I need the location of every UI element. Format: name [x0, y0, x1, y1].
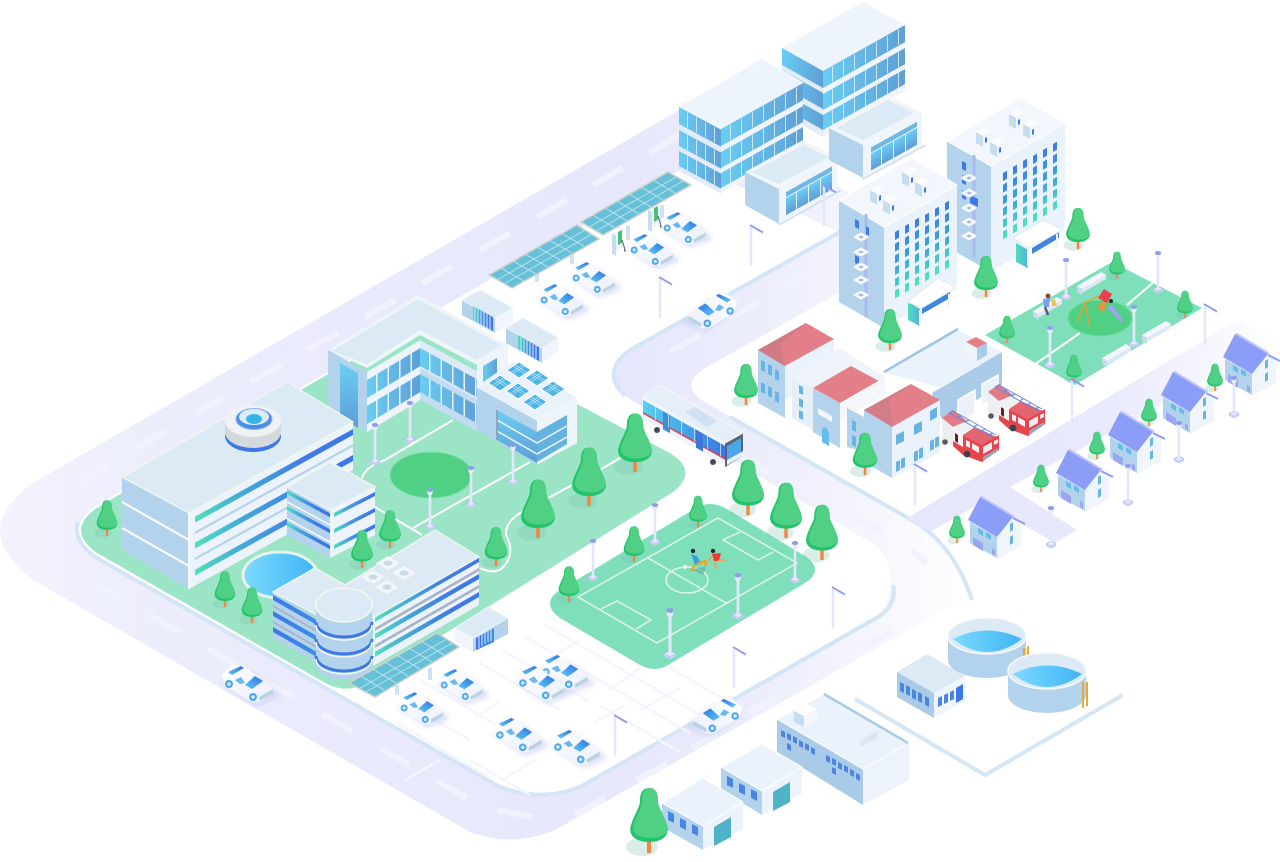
- small garage front: [662, 778, 743, 850]
- building: back office block: [782, 2, 905, 137]
- water tank rear: [948, 618, 1028, 678]
- rooftop solar panels: [488, 362, 565, 410]
- house: [1223, 333, 1280, 396]
- main road network: [0, 98, 980, 840]
- tree: [94, 500, 117, 538]
- tree: [732, 364, 758, 407]
- playground lamps and trees: [997, 251, 1193, 383]
- water tank front: [1008, 653, 1087, 713]
- fire station: [758, 323, 1002, 478]
- people on bench: [1043, 294, 1057, 315]
- left house: [758, 323, 834, 418]
- building: shop near charging station: [745, 140, 841, 225]
- house: [1108, 411, 1165, 474]
- tree: [377, 510, 401, 550]
- car on south-east road: [686, 699, 743, 737]
- tree: [766, 483, 802, 541]
- middle house: [792, 348, 885, 448]
- soccer players: [683, 549, 726, 575]
- road curbs: [77, 232, 894, 795]
- solar canopy right: [581, 172, 691, 240]
- panel: green campus lawn: [80, 320, 686, 690]
- rooftop circular skylight: [225, 405, 281, 452]
- tree: [621, 526, 644, 564]
- entrance canopy: [907, 278, 956, 326]
- sand circle: [1068, 300, 1132, 336]
- storage container one: [462, 290, 513, 333]
- parking lot lines: [395, 625, 725, 795]
- building: front office block: [679, 59, 803, 194]
- large foreground tree: [626, 788, 668, 856]
- tree: [482, 527, 507, 568]
- pump house: [897, 654, 965, 718]
- central round lawn: [390, 452, 472, 498]
- tower windows: [895, 201, 949, 298]
- car on south road: [221, 666, 281, 706]
- white block: fire station district: [692, 0, 1280, 640]
- rooftop units: [870, 167, 930, 215]
- tree: [212, 571, 235, 609]
- air conditioning units: [361, 556, 416, 600]
- campus walking paths: [362, 420, 625, 571]
- fire truck rear: [988, 384, 1045, 436]
- round tower: [316, 588, 372, 680]
- solar canopy left: [489, 225, 599, 288]
- tree: [687, 496, 707, 528]
- apartment tower front: [839, 158, 957, 328]
- fire truck front: [942, 410, 999, 462]
- panel: soccer field: [550, 504, 815, 669]
- tree: [728, 460, 764, 518]
- EV charger two: [648, 204, 661, 232]
- tree: [239, 587, 262, 625]
- residential lamps and trees: [947, 364, 1239, 548]
- house: [1161, 371, 1218, 434]
- small garage rear: [721, 744, 802, 815]
- tree: [349, 530, 373, 570]
- campus lamps: [370, 401, 518, 530]
- EV charger one: [612, 228, 625, 256]
- storage container two: [506, 318, 558, 363]
- building: shop rear: [829, 95, 926, 179]
- house: [1056, 449, 1113, 512]
- swimming pool: [243, 552, 317, 598]
- entrance canopy: [1013, 220, 1063, 268]
- laboratory building: [328, 295, 508, 432]
- car on east road: [681, 294, 738, 332]
- street poles by parking: [614, 587, 845, 756]
- tree: [1064, 208, 1090, 251]
- white city block: campus and parking: [78, 164, 891, 795]
- balconies: [852, 214, 870, 317]
- street pole near shop: [823, 185, 836, 226]
- garage block: [884, 329, 1002, 424]
- playground path: [1034, 281, 1155, 365]
- long utility building: [777, 694, 909, 805]
- apartment tower rear: [947, 98, 1065, 272]
- benches: [1033, 272, 1171, 367]
- water treatment slab: [855, 695, 1123, 775]
- tree: [972, 256, 998, 299]
- solar canopy at campus: [349, 633, 459, 697]
- road lane dashes: [38, 135, 926, 817]
- tree: [850, 433, 877, 477]
- hospital wing: [287, 462, 375, 558]
- rooftop units: [976, 109, 1038, 157]
- street poles by lot: [659, 225, 763, 318]
- solar roof annex: [477, 362, 577, 465]
- cars at chargers: [537, 212, 713, 319]
- tree: [876, 309, 902, 352]
- tower windows: [1003, 142, 1057, 240]
- right house: [847, 384, 940, 478]
- tree: [614, 414, 652, 475]
- field markings: [578, 518, 797, 643]
- center circle: [666, 567, 708, 593]
- cars in parking lot: [397, 655, 607, 768]
- tree: [556, 566, 579, 604]
- residential road: [907, 320, 1280, 543]
- soccer field lamps: [588, 503, 800, 659]
- storage container three: [455, 607, 508, 652]
- tree: [517, 480, 555, 541]
- hospital front block: [273, 530, 479, 680]
- city bus: [643, 385, 743, 467]
- tree: [802, 505, 838, 563]
- balconies: [960, 155, 978, 258]
- tree: [568, 448, 606, 509]
- street poles by fire station: [914, 304, 1217, 505]
- swing and slide: [1077, 289, 1124, 328]
- hospital main building: [122, 382, 353, 589]
- panel: playground lawn: [985, 262, 1202, 385]
- house: [968, 496, 1025, 559]
